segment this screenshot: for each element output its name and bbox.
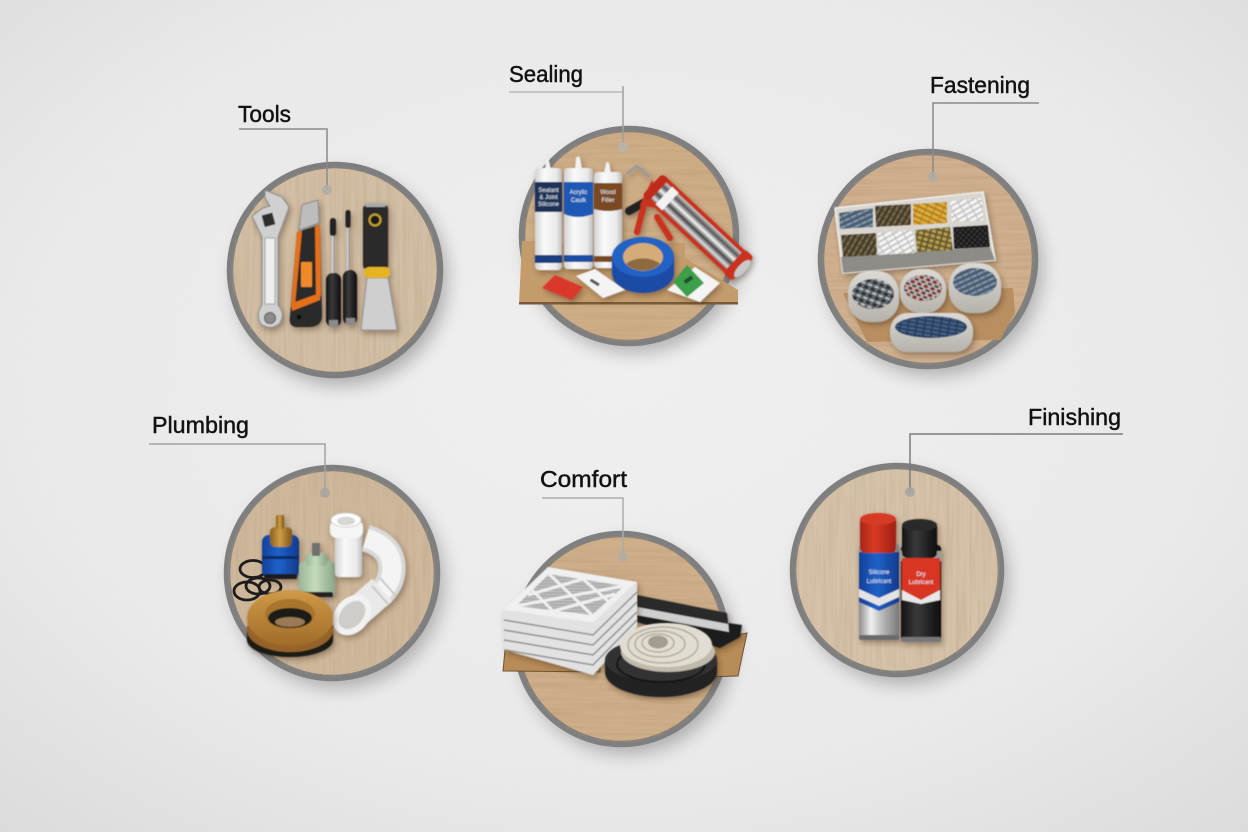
icon: masking tape (612, 237, 674, 293)
wooden shelf (843, 288, 1015, 342)
leader line: Sealing (509, 86, 628, 152)
heading: Fastening: Fastening (930, 72, 1030, 98)
icon: black spray can: Lubricant (909, 580, 934, 586)
leader line: Tools (239, 129, 332, 195)
leader line: Comfort (542, 498, 628, 562)
icon: blue spray can: Silicone (868, 570, 890, 576)
icon: sealant cartridges: Filler (602, 198, 615, 204)
heading: Sealing: Sealing (509, 61, 583, 87)
panel: fastening (817, 72, 1042, 376)
icon: air filters (503, 567, 637, 675)
icon: adjustable wrench (252, 190, 289, 328)
icon: foam tape rolls (605, 623, 717, 697)
heading: Comfort: Comfort (540, 466, 628, 492)
icon: caulk gun (626, 166, 756, 283)
icon: utility knife (290, 200, 322, 327)
icon: black spray can (901, 519, 941, 642)
heading: Tools: Tools (238, 101, 291, 127)
panel: plumbing (149, 412, 444, 688)
icon: blue spray can (859, 513, 899, 640)
icon: weatherstrips (637, 595, 742, 648)
wooden shelf (503, 633, 747, 677)
icon: green cartridge (299, 543, 335, 597)
icon: blue cartridge (262, 515, 299, 579)
icon: sealant cartridges: Wood (600, 190, 616, 196)
icon: putty knife (361, 203, 397, 330)
icon: blue spray can: Lubricant (867, 579, 892, 585)
icon: sealant cartridges: Sealant (538, 188, 559, 194)
icon: white pipe fittings (325, 513, 396, 643)
leader line: Fastening (928, 103, 1039, 182)
icon: sealant cartridges: & Joint (539, 195, 558, 201)
panel: comfort (503, 466, 747, 754)
icon: screwdrivers (326, 210, 357, 327)
icon: sealant scrapers (542, 265, 720, 302)
icon: sealant cartridges: Silicone (538, 202, 560, 208)
icon: sealant cartridges: Acrylic (570, 190, 587, 196)
wooden shelf (519, 241, 738, 304)
heading: Plumbing: Plumbing (152, 412, 249, 438)
icon: sealant cartridges (535, 156, 622, 270)
icon: wax ring (247, 590, 333, 657)
icon: small tubs (848, 263, 1001, 352)
icon: rubber rings (234, 560, 281, 600)
icon: sealant cartridges: Caulk (571, 198, 587, 204)
leader line: Plumbing (149, 444, 330, 498)
heading: Finishing: Finishing (1028, 404, 1121, 430)
icon: organizer box (835, 192, 995, 273)
panel: finishing (789, 404, 1123, 684)
panel: tools (227, 101, 447, 385)
icon: black spray can: Dry (916, 572, 926, 578)
panel: sealing (509, 61, 756, 353)
leader line: Finishing (905, 434, 1123, 497)
